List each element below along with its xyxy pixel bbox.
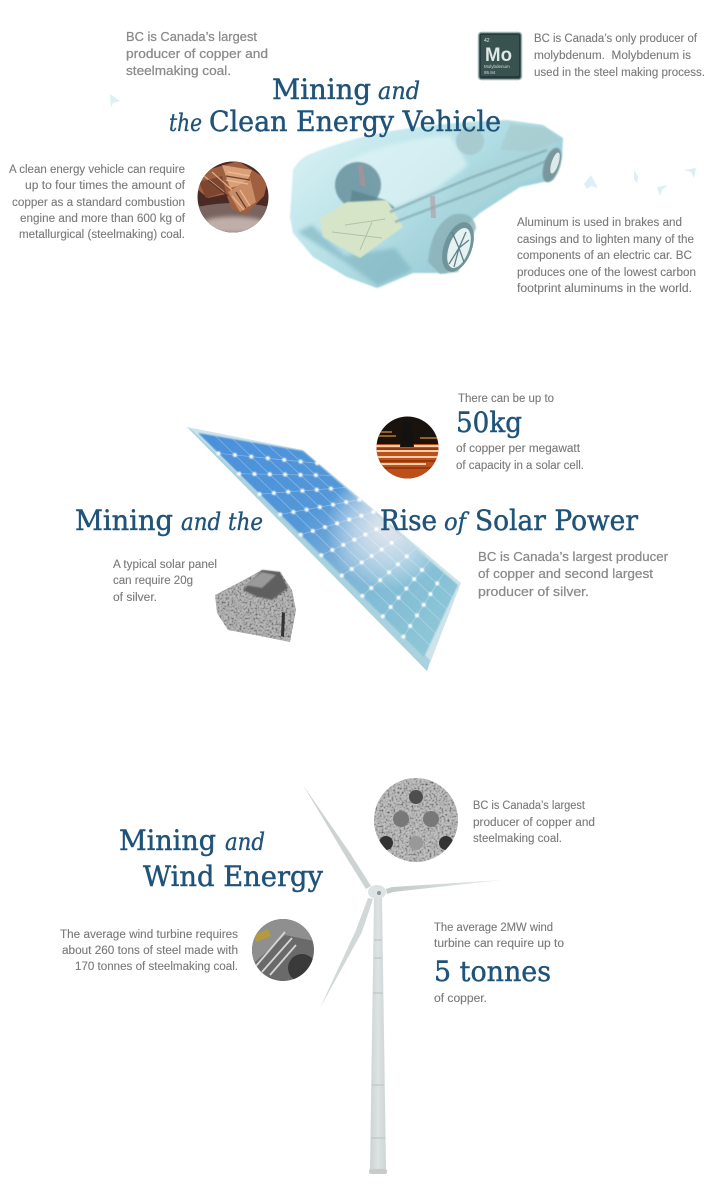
- text: BC largest producer: steelmaking coal.: [126, 63, 231, 78]
- heading: Mining and the Clean Energy Vehicle: Mining: [272, 73, 371, 106]
- heading: Mining and the Rise of Solar Power: [75, 504, 639, 537]
- text: BC copper and silver: BC is Canada’s largest producer: [478, 549, 669, 564]
- text: steel requirement: 170 tonnes of steelmaking coal.: [75, 961, 238, 973]
- text: molybdenum fact: molybdenum. Molybdenum is: [534, 50, 691, 62]
- text: copper requirement: copper as a standard combustion: [12, 197, 185, 209]
- text: BC largest producer wind: steelmaking coal.: [473, 833, 562, 845]
- text: copper requirement: engine and more than 600 kg of: [20, 213, 186, 225]
- text: silver requirement: A typical solar panel: [113, 559, 217, 571]
- text: BC largest producer wind: [473, 800, 595, 845]
- text: BC largest producer wind: producer of copper and: [473, 817, 595, 829]
- text: molybdenum fact: [534, 33, 705, 79]
- stat: 50kg: 50kg: [456, 406, 522, 439]
- text: molybdenum fact: BC is Canada’s only producer of: [534, 33, 698, 45]
- illustration: solar panel: [187, 427, 461, 671]
- text: aluminum fact: footprint aluminums in the world.: [517, 283, 692, 295]
- section: wind energy: [60, 778, 595, 1174]
- heading: Mining and the Clean Energy Vehicle: the: [169, 109, 202, 137]
- text: there can be up to: There can be up to: [458, 393, 554, 405]
- section: clean energy vehicle: [9, 29, 705, 295]
- illustration: wind turbine: [303, 785, 502, 1174]
- text: of copper: of copper.: [434, 993, 487, 1005]
- text: copper per megawatt: of capacity in a solar cell.: [456, 460, 584, 472]
- text: silver requirement: can require 20g: [113, 575, 193, 587]
- text: silver requirement: of silver.: [113, 592, 157, 604]
- text: average 2MW turbine: The average 2MW wind: [434, 922, 553, 934]
- heading: Mining and Wind Energy: and: [225, 828, 265, 856]
- heading: Mining and the Clean Energy Vehicle: [169, 73, 501, 138]
- text: steel requirement: The average wind turbine requires: [60, 929, 238, 941]
- text: copper requirement: A clean energy vehicle can require: [9, 164, 185, 176]
- text: aluminum fact: casings and to lighten many of the: [517, 234, 694, 246]
- heading: Mining and Wind Energy: Mining: [119, 824, 216, 857]
- icon: molybdenum periodic tile: 42: [484, 38, 490, 44]
- text: BC largest producer wind: BC is Canada’s largest: [473, 800, 586, 812]
- text: BC largest producer: [126, 29, 268, 78]
- icon: molybdenum periodic tile: Molybdenum: [484, 64, 510, 69]
- text: copper requirement: metallurgical (steelmaking) coal.: [19, 229, 185, 241]
- text: average 2MW turbine: [434, 922, 564, 950]
- heading: Mining and Wind Energy: [119, 824, 323, 893]
- text: silver requirement: [113, 559, 217, 604]
- heading: Mining and the Rise of Solar Power: and the: [181, 508, 263, 536]
- text: BC copper and silver: [478, 549, 669, 599]
- icon: molybdenum periodic tile: 95.94: [484, 70, 496, 75]
- text: aluminum fact: produces one of the lowest carbon: [517, 267, 696, 279]
- illustration: translucent car: [290, 120, 565, 288]
- photo: steel plant circle: [252, 919, 316, 982]
- text: copper per megawatt: of copper per megawatt: [456, 443, 581, 455]
- text: BC largest producer: producer of copper and: [126, 46, 268, 61]
- heading: Mining and the Rise of Solar Power: of: [444, 508, 470, 536]
- text: aluminum fact: Aluminum is used in brakes and: [517, 217, 682, 229]
- photo: copper wire circle: [197, 161, 269, 233]
- text: average 2MW turbine: turbine can require up to: [434, 938, 564, 950]
- photo: silver ore rock: [215, 570, 296, 642]
- text: copper requirement: up to four times the amount of: [25, 180, 186, 192]
- text: molybdenum fact: used in the steel making process.: [534, 67, 705, 79]
- text: aluminum fact: components of an electric car. BC: [517, 250, 692, 262]
- icon: molybdenum periodic tile: [478, 32, 522, 80]
- text: copper per megawatt: [456, 443, 584, 472]
- text: BC largest producer: BC is Canada’s largest: [126, 29, 257, 44]
- section: solar power: [75, 393, 669, 671]
- text: steel requirement: [60, 929, 238, 973]
- text: BC copper and silver: producer of silver.: [478, 584, 589, 599]
- text: copper requirement: [9, 164, 186, 241]
- text: BC copper and silver: of copper and second largest: [478, 566, 653, 581]
- icon: birds decoration: [110, 94, 696, 196]
- heading: Mining and the Rise of Solar Power: Rise: [380, 504, 437, 537]
- text: steel requirement: about 260 tons of steel made with: [62, 945, 238, 957]
- heading: Mining and Wind Energy: Wind Energy: [143, 860, 323, 893]
- heading: Mining and the Clean Energy Vehicle: Clean Energy Vehicle: [209, 105, 501, 138]
- icon: molybdenum periodic tile: Mo: [485, 45, 512, 66]
- heading: Mining and the Rise of Solar Power: Solar Power: [475, 504, 639, 537]
- stat: 5 tonnes: 5 tonnes: [434, 955, 551, 988]
- photo: steel rolls circle: [374, 778, 458, 862]
- heading: Mining and the Clean Energy Vehicle: and: [378, 77, 420, 105]
- photo: molten copper circle: [376, 416, 440, 480]
- heading: Mining and the Rise of Solar Power: Mining: [75, 504, 173, 537]
- text: aluminum fact: [517, 217, 696, 295]
